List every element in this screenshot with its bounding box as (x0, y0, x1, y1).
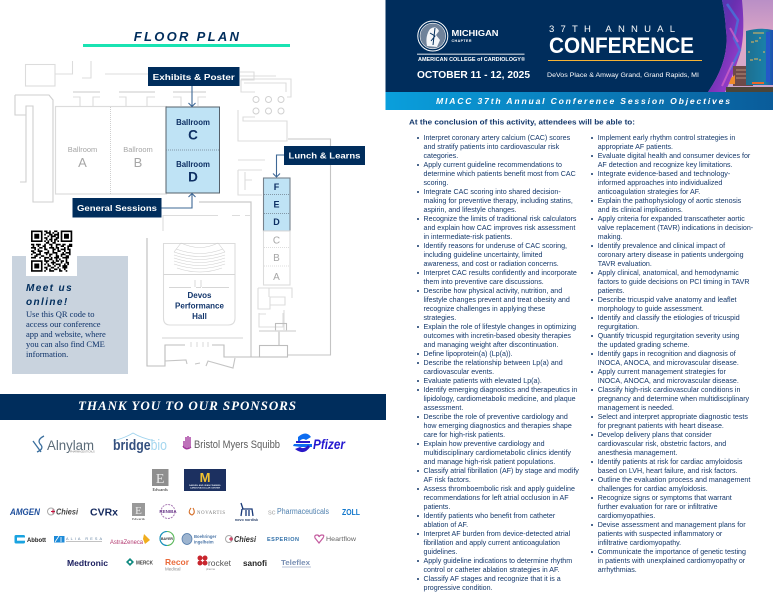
circular columns (253, 96, 284, 114)
objectives list: right column: Identify gaps in recognition and diagnosis of (598, 350, 736, 358)
logo: bridgebio: bridgebio (113, 438, 167, 454)
conference heading: CONFERENCE (549, 33, 694, 58)
objectives list: left column: them into preventive care discussions. (424, 278, 544, 286)
callout: general sessions: General Sessions (77, 203, 157, 213)
logo: Alia Resa: ALIA RESA (66, 537, 102, 541)
objectives list: left column: recommendations for left atrial occlusion in AF (424, 494, 569, 502)
conference date: OCTOBER 11 - 12, 2025 (417, 70, 531, 81)
objectives list: right column: Quantify tricuspid regurgitation severity using (598, 332, 739, 340)
objectives list: right column: Recognize signs or symptoms that warrant (598, 494, 732, 502)
objectives list: right column: patients with suspected inflammatory or (598, 530, 722, 538)
title underline (83, 44, 290, 47)
logo: Heartflow (315, 535, 356, 543)
logo: Boehringer Ingelheim (182, 534, 217, 544)
objectives list: left column: care for high-risk patients. (424, 431, 505, 439)
meeting rooms C B A: B (273, 253, 280, 264)
objectives band (386, 92, 773, 110)
objectives list: left column: aspirin, and lifestyle changes. (424, 206, 517, 214)
objectives list: right column: cardiovascular risk, obstetric factors, and (598, 440, 726, 448)
objectives list: right column: INOCA, ANOCA, and microvascular disease. (598, 377, 739, 385)
logo: Bayer (160, 532, 174, 546)
logo: University of Michigan: SAMUEL AND JEAN FRANKEL (189, 484, 222, 487)
objectives list: right column: and its clinical implications. (598, 206, 683, 214)
objectives list: right column: AF detection and recognize key limitations. (598, 161, 733, 169)
QR instructions text: app and website, where (26, 329, 106, 339)
objectives list: left column: lifestyle changes prevent and treat obesity and (424, 296, 570, 304)
callout: lunch and learns: Lunch & Learns (288, 151, 361, 161)
logo: Novartis (189, 508, 225, 516)
objectives list: right column: for pregnant patients with heart disease. (598, 422, 724, 430)
title: floor plan: FLOOR PLAN (134, 29, 241, 44)
objectives list: left column: cardiovascular events. (424, 368, 494, 376)
floor plan map (15, 61, 365, 368)
panel: meet us online (12, 226, 128, 374)
logo: Abbott: Abbott (27, 538, 46, 544)
objectives list: right column: Implement early rhythm control strategies in (598, 134, 735, 142)
arrow: lunch and learns to room F (273, 155, 284, 177)
logo: Edwards small (132, 503, 146, 521)
objectives list: left column: categories. (424, 152, 458, 160)
QR code (26, 226, 77, 276)
meeting rooms C B A: A (273, 272, 280, 283)
objectives intro line: At the conclusion of this activity, attendees will be able to: (409, 118, 635, 126)
objectives list: right column: Outline the evaluation process and management (598, 476, 750, 484)
building outline walls (15, 61, 330, 368)
logo: Chiesi second row: Chiesi (234, 535, 257, 544)
callout: general sessions (72, 198, 162, 218)
objectives list: left column: Classify AF stages and recognize that it is a (424, 575, 561, 583)
logo: Edwards small: Edwards (132, 517, 146, 521)
logo: Pfizer (293, 434, 346, 452)
Devos Performance Hall: Hall (192, 312, 207, 321)
logo: Alia Resa (54, 536, 102, 542)
meeting rooms F E D highlighted: F (274, 182, 280, 192)
logo: Alnylam (33, 436, 95, 454)
objectives list: right column: coronary artery disease in patients undergoing (598, 251, 744, 259)
objectives list: right column: patients. (598, 287, 625, 295)
objectives list: right column: INOCA, ANOCA, and microvascular disease. (598, 359, 739, 367)
gold rule (548, 60, 702, 61)
meeting rooms F E D highlighted: E (273, 200, 280, 210)
objectives list: left column: progressive condition. (424, 584, 493, 592)
objectives list: right column: arrhythmias. (598, 566, 637, 574)
venue: DeVos Place & Amway Grand, Grand Rapids, MI (547, 72, 699, 79)
objectives list: right column: the updated grading scheme. (598, 341, 690, 349)
ballrooms C and D highlighted: Ballroom (176, 160, 210, 169)
logo: University of Michigan: CARDIOVASCULAR CENTER (190, 486, 221, 490)
objectives list: left column: and explain how CAC improves risk assessment (424, 224, 575, 232)
37th annual: 37TH ANNUAL (549, 24, 675, 35)
logo: scPharmaceuticals: sc (268, 508, 276, 516)
objectives list: left column: Interpret coronary artery calcium (CAC) scores (424, 134, 570, 142)
objectives list: left column: and manage high-risk patient populations. (424, 458, 555, 466)
skyline photo (708, 0, 773, 92)
logo: Merck: MERCK (136, 560, 153, 566)
logo: Bristol Myers Squibb: Bristol Myers Squibb (194, 439, 280, 451)
objectives list: left column: strategies. (424, 314, 456, 322)
logo: University of Michigan: M (200, 470, 210, 485)
heading: meet us online: online! (26, 297, 69, 308)
logo: circular purple emblem (159, 504, 177, 518)
logo: Heartflow: Heartflow (326, 536, 356, 543)
logo: University of Michigan (184, 469, 226, 491)
objectives list: right column: cardiomyopathies. (598, 512, 655, 520)
objectives list: left column: guidelines. (424, 548, 457, 556)
objectives list: right column: Classify high-risk cardiovascular conditions in (598, 386, 740, 394)
objectives list: left column: Identify emerging diagnostics and therapeutics in (424, 386, 577, 394)
objectives list: left column: Interpret AF burden from device-detected atrial (424, 530, 570, 538)
objectives list: right column: making. (598, 233, 623, 241)
ACC seal logo (418, 21, 448, 51)
objectives list: left column: Recognize the limits of traditional risk calculators (424, 215, 576, 223)
logo: Pfizer: Pfizer (313, 436, 346, 452)
arrow: exhibits to ballroom C (188, 86, 196, 106)
objectives list: left column: and stratify patients into cardiovascular risk (424, 143, 559, 151)
objectives list: left column: ablation of AF. (424, 521, 468, 529)
ballrooms C and D highlighted: Ballroom (176, 118, 210, 127)
logo: Alnylam: Alnylam (47, 438, 94, 453)
logo: Esperion: ESPERION (267, 537, 299, 543)
ballrooms C and D highlighted (166, 107, 220, 193)
objectives list: right column: anesthesia management. (598, 449, 677, 457)
ballrooms A and B: Ballroom (123, 145, 153, 154)
objectives list: left column: making for preventive therapy, including statins, (424, 197, 573, 205)
objectives list: left column: Apply current guideline recommendations to (424, 161, 562, 169)
logo: Sanofi: sanofi (243, 559, 267, 568)
objectives list: left column: Identify patients who benefit from catheter (424, 512, 555, 520)
objectives list: left column: including guideline uncertainty, limited (424, 251, 542, 259)
logo: Recor Medical: Medical (165, 566, 181, 572)
logo: Amgen: AMGEN (9, 507, 41, 518)
logo: Alnylam: PHARMACEUTICALS (70, 450, 95, 454)
logo: Boehringer Ingelheim: Boehringer (194, 534, 217, 539)
ballrooms A and B: B (134, 155, 142, 170)
Devos Performance Hall (164, 243, 235, 325)
logo: AstraZeneca (110, 534, 150, 546)
objectives list: right column: appropriate AF patients. (598, 143, 673, 151)
objectives list: right column: Identify and classify the etiologies of tricuspid (598, 314, 740, 322)
Devos Performance Hall: Devos (187, 291, 212, 300)
objectives list: left column: Assess thromboembolic risk and apply guideline (424, 485, 575, 493)
logo: Edwards small: E (135, 505, 142, 517)
Michigan chapter wordmark: MICHIGAN (452, 29, 499, 38)
objectives list: right column: management is needed. (598, 404, 674, 412)
objectives band: MIACC 37th Annual Conference Session Objectives (436, 96, 730, 106)
Michigan chapter wordmark (452, 29, 499, 43)
objectives list: left column: Integrate CAC scoring into shared decision- (424, 188, 561, 196)
arrow: general sessions to ballroom D (161, 194, 196, 208)
objectives list: right column: anticoagulation strategies for AF. (598, 188, 700, 196)
objectives list: left column: fibrillation and apply current anticoagulation (424, 539, 560, 547)
objectives list: right column: infiltrative cardiomyopathy. (598, 539, 681, 547)
logo: Merck (126, 558, 153, 566)
objectives list: left column: outcomes with incretin-based obesity therapies (424, 332, 571, 340)
objectives list: right column: Evaluate digital health and consumer devices for (598, 152, 750, 160)
callout: exhibits and poster: Exhibits & Poster (153, 72, 235, 82)
objectives list: left column: Evaluate patients with elevated Lp(a). (424, 377, 542, 385)
objectives list: left column: AF risk factors. (424, 476, 471, 484)
logo: Zoll: ZOLL (342, 508, 360, 517)
objectives list: left column: Interpret CAC results confidently and incorporate (424, 269, 577, 277)
objectives list: left column: multidisciplinary cardiometabolic clinics identify (424, 449, 571, 457)
callout: exhibits and poster (148, 67, 240, 86)
objectives list: left column: patients. (424, 503, 450, 511)
objectives list: right column: informed approaches into individualized (598, 179, 722, 187)
objectives list: right column: Develop delivery plans that consider (598, 431, 712, 439)
objectives list: left column: recognize challenges in applying these (424, 305, 545, 313)
sponsors banner: THANK YOU TO OUR SPONSORS (78, 398, 296, 413)
objectives list: left column: Describe the role of preventive cardiology and (424, 413, 568, 421)
objectives list: right column: Describe tricuspid valve anatomy and leaflet (598, 296, 736, 304)
objectives list: left column: control or catheter ablation strategies in AF. (424, 566, 560, 574)
logo: Rocket Pharma: pharma (206, 567, 215, 571)
Michigan chapter wordmark: CHAPTER (452, 39, 472, 43)
objectives list: left column: Identify reasons for underuse of CAC scoring, (424, 242, 567, 250)
objectives list: right column: pregnancy and determine when multidisciplinary (598, 395, 749, 403)
objectives list: right column: Explain the pathophysiology of aortic stenosis (598, 197, 741, 205)
QR instructions text: Use this QR code to (26, 309, 94, 319)
objectives list: left column (417, 134, 579, 592)
logo: Chiesi (48, 508, 79, 516)
objectives list: left column: in intermediate-risk patients. (424, 233, 512, 241)
objectives list: right column: TAVR evaluation. (598, 260, 652, 268)
objectives list: right column: regurgitation. (598, 323, 639, 331)
objectives list: right column: further evaluation for rare or infiltrative (598, 503, 718, 511)
header: conference banner (386, 0, 773, 92)
logo: Teleflex: Teleflex (281, 558, 311, 567)
meeting rooms F E D highlighted (264, 178, 290, 231)
objectives list: right column: Communicate the importance of genetic testing (598, 548, 746, 556)
objectives list: left column: scoring. (424, 179, 448, 187)
objectives list: right column: Integrate evidence-based and technology- (598, 170, 730, 178)
ballrooms C and D highlighted: C (188, 128, 198, 142)
objectives list: left column: Apply guideline indications to determine rhythm (424, 557, 572, 565)
objectives list: left column: Define lipoprotein(a) (Lp(a)). (424, 350, 513, 358)
QR instructions text: access our conference (26, 319, 101, 329)
logo: Edwards large (152, 469, 168, 492)
logo: circular purple emblem: RENIBA (159, 509, 177, 514)
objectives list: right column: factors to guide decisions on PCI timing in TAVR (598, 278, 750, 286)
logo: Edwards large: Edwards (153, 487, 168, 492)
Devos Performance Hall: Performance (175, 302, 224, 310)
objectives list: right column: based on LVH, heart failure, and risk factors. (598, 467, 738, 475)
logo: Novo Nordisk: novo nordisk (235, 518, 259, 522)
logo: scPharmaceuticals: Pharmaceuticals (277, 507, 329, 516)
objectives list: right column: Apply current management strategies for (598, 368, 726, 376)
objectives list: right column: Devise assessment and management plans for (598, 521, 746, 529)
objectives list: right column: Identify patients at risk for cardiac amyloidosis (598, 458, 742, 466)
meeting rooms F E D highlighted: D (273, 217, 280, 227)
ballrooms C and D highlighted: D (188, 170, 198, 184)
logo: Novo Nordisk (235, 503, 259, 522)
objectives list: left column: Describe how physical activity, nutrition, and (424, 287, 562, 295)
objectives list: left column: Explain the role of lifestyle changes in optimizing (424, 323, 576, 331)
heading: meet us online: Meet us (26, 283, 73, 294)
ballrooms A and B: A (78, 155, 87, 170)
logo: Bayer: BAYER (161, 537, 173, 541)
logo: Recor Medical: Recor (165, 557, 190, 567)
objectives list: right column: Select and interpret appropriate diagnostic tests (598, 413, 748, 421)
logo: Abbott (14, 535, 46, 544)
sponsor logos (9, 433, 360, 572)
objectives list: right column: challenges for cardiac amyloidosis. (598, 485, 708, 493)
logo: Bristol Myers Squibb (183, 436, 280, 451)
logo: Rocket Pharma (198, 556, 232, 571)
meeting rooms C B A (264, 231, 290, 285)
objectives list: right column: in patients with unexplained cardiomyopathy or (598, 557, 745, 565)
rule under logo (417, 53, 524, 56)
objectives list: right column: Identify prevalence and clinical impact of (598, 242, 725, 250)
objectives list: left column: determine which patients benefit most from CAC (424, 170, 576, 178)
QR instructions text: you can also find CME (26, 339, 105, 349)
objectives list: right column: morphology to guide assessment. (598, 305, 704, 313)
meeting rooms C B A: C (273, 236, 280, 246)
objectives list: left column: Classify atrial fibrillation (AF) by stage and modify (424, 467, 579, 475)
objectives list: left column: lipidology, cardiometabolic medicine, and plaque (424, 395, 576, 403)
American College of Cardiology: AMERICAN COLLEGE of CARDIOLOGY® (418, 56, 525, 63)
logo: Chiesi second row (226, 535, 257, 544)
logo: AstraZeneca: AstraZeneca (110, 539, 143, 546)
objectives list: left column: awareness, and cost or radiation concerns. (424, 260, 559, 268)
QR instructions text: information. (26, 349, 68, 359)
callout: lunch and learns (284, 146, 365, 165)
objectives list: left column: how emerging diagnostics and therapies shape (424, 422, 572, 430)
objectives list: right column: Apply clinical, anatomical, and hemodynamic (598, 269, 739, 277)
objectives list: left column: Explain how preventive cardiology and (424, 440, 545, 448)
ballrooms A and B (56, 106, 166, 194)
sponsors banner (0, 394, 386, 420)
objectives list: right column: Apply criteria for expanded transcatheter aortic (598, 215, 745, 223)
objectives list: right column (591, 134, 753, 574)
objectives list: right column: valve replacement (TAVR) indications in decision- (598, 224, 753, 232)
logo: CVRx: CVRx (90, 506, 118, 518)
ballrooms A and B: Ballroom (68, 145, 97, 154)
objectives list: left column: and managing weight after discontinuation. (424, 341, 558, 349)
objectives list: left column: Describe the relationship between Lp(a) and (424, 359, 563, 367)
logo: Boehringer Ingelheim: Ingelheim (194, 540, 214, 544)
logo: Edwards large: E (156, 472, 164, 487)
logo: Recor Medical (165, 557, 190, 572)
logo: Medtronic: Medtronic (67, 558, 108, 568)
objectives list: left column: assessment. (424, 404, 463, 412)
logo: Chiesi: Chiesi (56, 508, 79, 516)
logo: Novartis: NOVARTIS (197, 511, 225, 516)
logo: Rocket Pharma: rocket (208, 559, 232, 568)
